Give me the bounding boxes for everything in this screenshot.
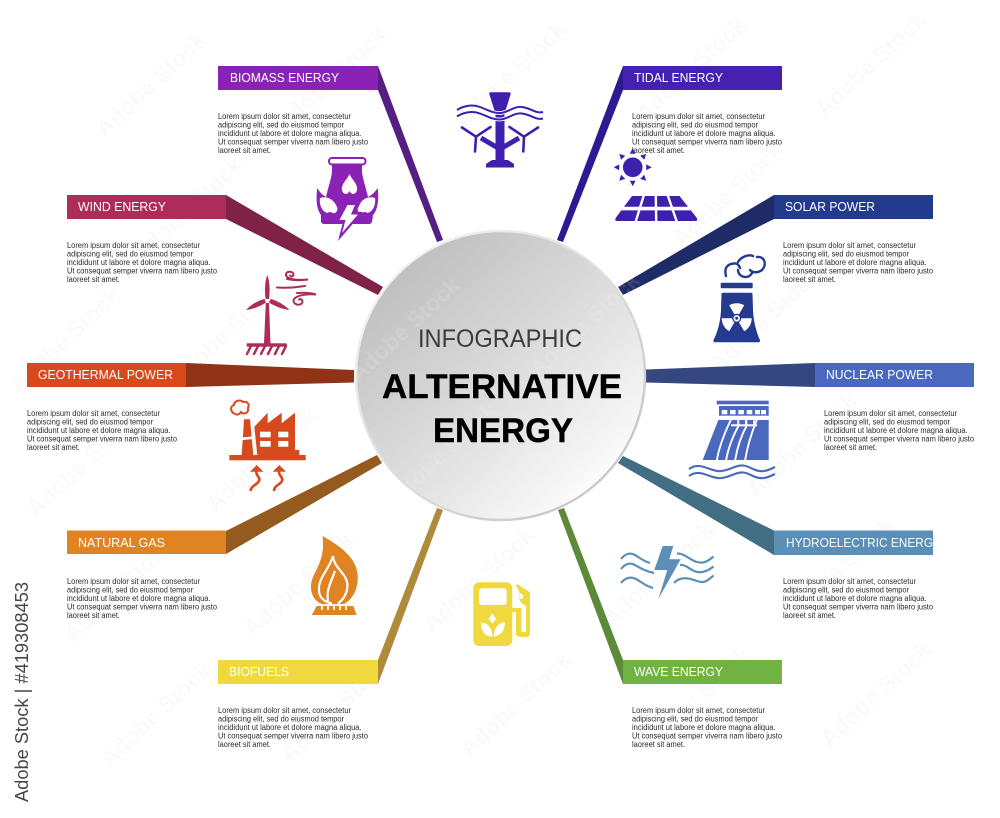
panel: solar power [612,148,934,295]
text block: natural gas: adipiscing elit, sed do eiusmod tempor [67,586,193,594]
background watermark: Adobe Stock [667,137,788,252]
ribbon: hydroelectric [618,456,774,555]
text block: nuclear: incididunt ut labore et dolore magna aliqua. [824,426,968,435]
icon: hydro dam [689,401,775,478]
text block: hydroelectric: laoreet sit amet. [783,611,836,620]
panel: wind energy [67,195,383,354]
text block: nuclear [824,409,975,452]
ribbon: tidal [557,66,623,242]
text block: natural gas: incididunt ut labore et dolore magna aliqua. [67,594,210,603]
text block: wind: Ut consequat semper viverra nam libero justo [67,266,218,275]
text block: hydroelectric: adipiscing elit, sed do eiusmod tempor [783,586,909,594]
background watermark: Adobe Stock [630,12,751,127]
text block: biomass [218,112,369,155]
text block: biofuels: Ut consequat semper viverra nam libero justo [218,731,369,740]
background watermark: Adobe Stock [275,652,396,767]
banner: natural gas [67,530,226,554]
text block: tidal: Lorem ipsum dolor sit amet, consectetur [632,112,765,121]
text block: biofuels: Lorem ipsum dolor sit amet, consectetur [218,706,351,715]
ribbon: wind [226,195,383,295]
panel: wave energy [558,508,783,749]
text block: nuclear: Ut consequat semper viverra nam libero justo [824,434,975,443]
panel: hydroelectric energy [618,401,941,620]
text block: solar: incididunt ut labore et dolore magna aliqua. [783,258,926,267]
central disc [344,231,645,520]
banner: biomass energy [218,66,378,90]
text block: natural gas: laoreet sit amet. [67,611,120,620]
text block: geothermal: laoreet sit amet. [27,443,80,452]
icon: sun and solar panel [612,148,700,222]
text block: geothermal: Ut consequat semper viverra nam libero justo [27,434,178,443]
banner: nuclear power [815,363,974,387]
banner: hydroelectric energy [774,530,941,555]
icon: nuclear cooling tower [713,255,765,342]
text block: solar: laoreet sit amet. [783,275,836,284]
banner: wind energy: WIND ENERGY [78,199,166,214]
text block: wave [632,706,783,749]
disc watermark: Adobe Stock [381,397,502,512]
banner: biomass energy: BIOMASS ENERGY [230,70,339,85]
text block: wave: Ut consequat semper viverra nam libero justo [632,731,783,740]
icon: biofuel pump [473,582,530,646]
background watermark: Adobe Stock [815,637,936,752]
icon: gas flame [311,536,358,615]
text block: geothermal: incididunt ut labore et dolore magna aliqua. [27,426,170,435]
banner: natural gas: NATURAL GAS [78,535,165,550]
text block: wind: laoreet sit amet. [67,275,120,284]
ribbon: biofuels [378,508,443,684]
icon: wave and lightning [621,546,714,599]
text block: wind: Lorem ipsum dolor sit amet, consectetur [67,241,200,250]
background watermark: Adobe Stock [201,402,322,517]
text block: nuclear: Lorem ipsum dolor sit amet, consectetur [824,409,957,418]
background watermark: Adobe Stock [238,527,359,642]
text block: tidal [632,112,783,155]
text block: hydroelectric: Lorem ipsum dolor sit amet, consectetur [783,577,916,586]
text block: hydroelectric: incididunt ut labore et dolore magna aliqua. [783,594,926,603]
text block: biomass: Lorem ipsum dolor sit amet, consectetur [218,112,351,121]
banner: biofuels: BIOFUELS [229,664,289,679]
disc watermark [344,267,645,512]
text block: natural gas: Lorem ipsum dolor sit amet, consectetur [67,577,200,586]
background watermark: Adobe Stock [455,647,576,762]
banner: wind energy [67,195,226,219]
text block: biofuels [218,706,369,749]
text block: geothermal [27,409,178,452]
text block: biofuels: laoreet sit amet. [218,740,271,749]
banner: solar power: SOLAR POWER [785,199,875,214]
text block: biomass: Ut consequat semper viverra nam libero justo [218,137,369,146]
panel: biomass energy [218,66,443,242]
background watermark: Adobe Stock [127,152,248,267]
background watermark: Adobe Stock [58,532,179,647]
text block: biofuels: incididunt ut labore et dolore magna aliqua. [218,723,362,732]
text block: wave: laoreet sit amet. [632,740,685,749]
text block: tidal: laoreet sit amet. [632,146,685,155]
banner: wave energy: WAVE ENERGY [634,664,723,679]
background watermark: Adobe Stock [450,17,571,132]
text block: geothermal: adipiscing elit, sed do eiusmod tempor [27,418,153,426]
ribbon: natural gas [226,455,382,554]
disc watermark: Adobe Stock [344,272,465,387]
text block: solar: Lorem ipsum dolor sit amet, consectetur [783,241,916,250]
background watermark: Adobe Stock [90,27,211,142]
title: alternative energy: ENERGY [433,412,573,450]
text block: hydroelectric [783,577,934,620]
text block: wind: adipiscing elit, sed do eiusmod tempor [67,250,193,258]
background watermark: Adobe Stock [21,407,142,522]
background watermark: Adobe Stock [598,517,719,632]
banner: geothermal power: GEOTHERMAL POWER [38,367,173,382]
background watermark: Adobe Stock [95,657,216,772]
text block: solar: adipiscing elit, sed do eiusmod tempor [783,250,909,258]
panel: biofuels [218,508,530,749]
text block: biomass: adipiscing elit, sed do eiusmod tempor [218,120,344,130]
ribbon: nuclear [646,363,815,387]
text block: hydroelectric: Ut consequat semper viverra nam libero justo [783,602,934,611]
background watermark: Adobe Stock [704,262,825,377]
text block: nuclear: laoreet sit amet. [824,443,877,452]
icon: tidal turbine [457,92,543,168]
text block: wind [67,241,218,284]
text block: biomass: laoreet sit amet. [218,146,271,155]
text block: tidal: Ut consequat semper viverra nam libero justo [632,137,783,146]
text block: tidal: incididunt ut labore et dolore magna aliqua. [632,129,776,138]
icon: wind turbine [246,272,316,354]
icon: geothermal factory [229,401,306,490]
ribbon: wave [558,508,623,684]
text block: wave: incididunt ut labore et dolore magna aliqua. [632,723,776,732]
panel: geothermal power [27,363,354,490]
text block: tidal: adipiscing elit, sed do eiusmod tempor [632,120,758,130]
title: alternative energy [382,368,622,450]
text block: biomass: incididunt ut labore et dolore magna aliqua. [218,129,362,138]
ribbon: solar [618,195,774,295]
panel: nuclear power [646,255,975,452]
text block: wave: Lorem ipsum dolor sit amet, consectetur [632,706,765,715]
background watermark: Adobe Stock [778,512,899,627]
background watermark: Adobe Stock [4,282,125,397]
background watermark: Adobe Stock [635,642,756,757]
ribbon: geothermal [186,363,354,387]
title: infographic: INFOGRAPHIC [418,325,582,353]
background watermark: Adobe Stock [270,22,391,137]
text block: wave: adipiscing elit, sed do eiusmod tempor [632,714,758,724]
banner: solar power [774,195,933,219]
background watermark: Adobe Stock [741,387,862,502]
text block: nuclear: adipiscing elit, sed do eiusmod tempor [824,418,950,426]
text block: natural gas [67,577,218,620]
text block: solar: Ut consequat semper viverra nam libero justo [783,266,934,275]
disc watermark: Adobe Stock [524,267,645,382]
panel: natural gas [67,455,382,620]
icon: biomass plant [317,158,378,241]
background watermark: Adobe Stock [418,522,539,637]
title: alternative energy: ALTERNATIVE [382,368,622,406]
banner: hydroelectric energy: HYDROELECTRIC ENERGY [786,535,941,550]
text block: natural gas: Ut consequat semper viverra nam libero justo [67,602,218,611]
banner: biofuels [218,660,378,684]
banner: geothermal power [27,363,186,387]
banner: tidal energy [623,66,782,90]
text block: geothermal: Lorem ipsum dolor sit amet, consectetur [27,409,160,418]
text block: biofuels: adipiscing elit, sed do eiusmod tempor [218,714,344,724]
text block: wind: incididunt ut labore et dolore magna aliqua. [67,258,210,267]
banner: tidal energy: TIDAL ENERGY [634,70,723,85]
stock credit: Adobe Stock | #419308453 [12,582,32,802]
ribbon: biomass [378,66,443,242]
text block: solar [783,241,934,284]
panel: tidal energy [457,66,783,242]
background watermark: Adobe Stock [164,277,285,392]
banner: nuclear power: NUCLEAR POWER [826,367,933,382]
background watermark: Adobe Stock [810,7,931,122]
banner: wave energy [623,660,782,684]
